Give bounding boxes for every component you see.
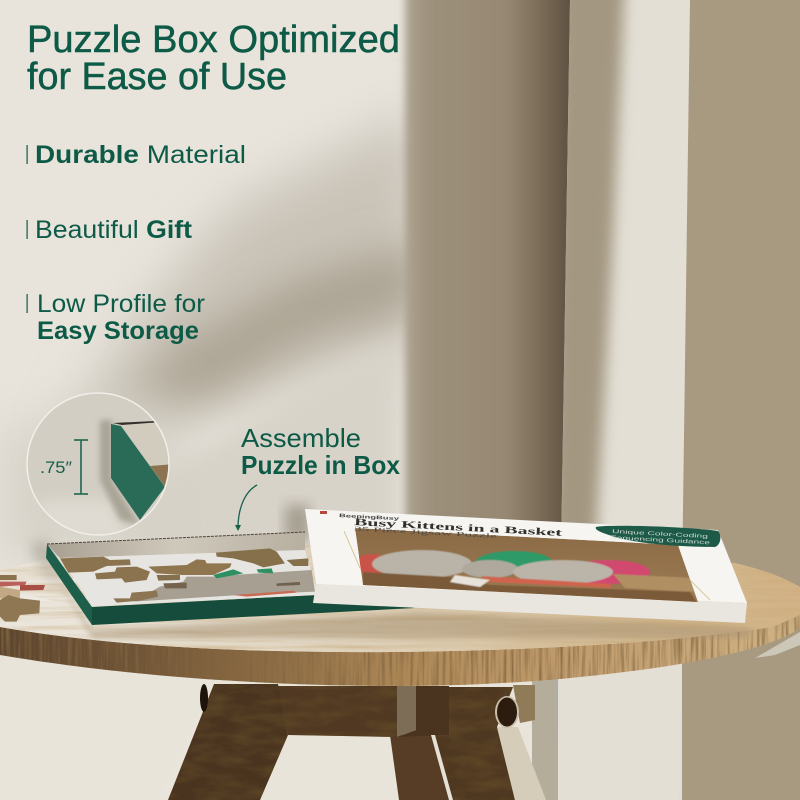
box wall in circle <box>111 424 165 520</box>
lower wall under table <box>0 640 535 800</box>
lid green badge: Unique Color-Coding <box>612 529 708 540</box>
lid green badge <box>596 526 720 547</box>
title: Puzzle Box Optimized <box>27 19 400 61</box>
feature: durable material: Durable Material <box>35 141 246 169</box>
open puzzle box <box>46 532 415 625</box>
lid title: 35 Piece Jigsaw Puzzle <box>354 527 498 540</box>
puzzle box lid <box>305 509 747 623</box>
lid title: Busy Kittens in a Basket <box>354 517 563 539</box>
lid photo <box>354 528 698 604</box>
feature: low profile storage: Low Profile for <box>37 290 205 318</box>
feature: low profile storage: Easy Storage <box>37 317 199 345</box>
curtain: right panel <box>682 0 800 800</box>
depth dimension bracket <box>74 440 88 494</box>
box interior in circle <box>121 423 175 467</box>
feature: low profile storage <box>26 290 205 345</box>
depth callout circle <box>27 393 175 540</box>
loose puzzle pieces <box>0 575 53 622</box>
under-table light strip <box>755 632 800 658</box>
arrow to box <box>235 485 257 531</box>
wall background <box>0 0 570 564</box>
box back wall <box>47 532 305 558</box>
table <box>0 545 800 800</box>
lid title <box>354 517 563 540</box>
lid green badge: Sequencing Guidance <box>610 535 710 546</box>
broad shade on wall <box>76 110 406 430</box>
title <box>27 19 400 98</box>
box left wall <box>46 544 92 625</box>
assemble label <box>241 423 401 480</box>
box front wall <box>92 594 415 625</box>
box floor <box>60 550 318 606</box>
shaded wall recess <box>400 0 570 522</box>
circle shading <box>44 502 122 534</box>
table legs <box>158 684 546 800</box>
lid brand mark <box>320 511 400 522</box>
lid brand mark: BeepingBusy <box>339 513 400 522</box>
feature: beautiful gift: Beautiful Gift <box>35 216 193 244</box>
assemble label: Assemble <box>241 423 361 453</box>
depth label: .75″ <box>40 458 72 477</box>
puzzle pieces in box <box>60 548 315 603</box>
table top surface <box>0 545 800 652</box>
curtain: light panel <box>562 0 690 528</box>
table front edge <box>0 615 800 686</box>
diagonal shadow on wall <box>120 245 420 425</box>
lit patch below shadow <box>180 372 400 546</box>
title: for Ease of Use <box>27 56 287 98</box>
assemble label: Puzzle in Box <box>241 450 401 480</box>
box shadows <box>30 505 750 638</box>
